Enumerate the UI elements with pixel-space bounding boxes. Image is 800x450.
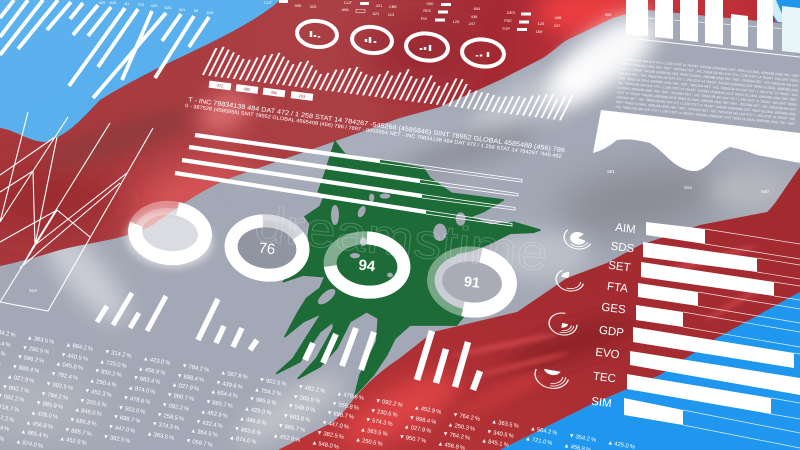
text block top right: SINT 78952 GLOBAL 4585488 (456) 786 / 7897 - 0002564 NET - INC 79834138 484 DAT 472 / 1 258 STAT 14 784267 -545 <box>618 76 798 97</box>
text block top right: GLOBAL 4565408 (456) 786 / 7897 - 0002564 NET - INC 79834138 484 DAT 472 / 1 258 STAT 14 784267 -545 SINT 78952 <box>619 62 799 83</box>
radial icon 2 <box>554 267 586 293</box>
donut 3 <box>327 234 407 296</box>
small top legend table: CUT <box>344 0 353 5</box>
comb chart value tags: 485 <box>243 86 251 92</box>
donut 4: 91 <box>463 274 481 292</box>
chart axis labels top-left: 325 <box>99 0 106 5</box>
category labels: SET <box>608 260 631 274</box>
small top legend table: 421 <box>376 3 383 8</box>
chart axis labels top-left: 625 <box>207 10 214 15</box>
chart axis labels top-left: 81 <box>125 1 130 6</box>
donut 3: 94 <box>358 257 377 275</box>
bar group B <box>198 299 257 350</box>
top right column chart <box>626 0 800 57</box>
category labels: SDS <box>610 241 635 255</box>
radial icon 1 <box>562 225 594 251</box>
small top legend table: CUT <box>264 0 273 5</box>
category labels: SIM <box>590 396 612 410</box>
category labels: GES <box>601 302 626 316</box>
chart axis labels top-left <box>99 0 214 15</box>
flag: top-right blue corner <box>762 0 800 25</box>
category labels: AIM <box>614 222 636 236</box>
category labels: EVO <box>595 347 620 361</box>
small rings row <box>296 19 505 69</box>
text block top right: INC 79834138 484 DAT 472 / 1 258 STAT 14 784267 -545268 (4585846) SINT 78952 GLOBAL 4585488 (456) 786 / 7897 <box>615 105 795 126</box>
chart axis labels top-left: 421 <box>179 7 186 12</box>
text block top right: STAT 14 784267 -545268 (4585846) SINT 78952 GLOBAL 4585488 (456) 786 / 7897 - 0002564 NET - INC 79834138 484 DAT <box>619 67 799 88</box>
area chart top right: 614 <box>684 185 692 190</box>
donut 2: 76 <box>258 240 276 258</box>
small top legend table: 125 <box>538 21 545 26</box>
watermark: dreamstime <box>252 195 551 282</box>
donut 4 <box>432 250 512 314</box>
ring 2 <box>351 25 393 55</box>
flag: lower-right blue <box>500 292 800 450</box>
category labels: GDP <box>598 325 625 340</box>
progress bars <box>175 135 522 226</box>
category labels <box>590 222 636 410</box>
chart: line chart with frame <box>0 112 153 311</box>
small top legend table: 436 <box>555 15 562 20</box>
small top legend table: CBE <box>389 4 397 9</box>
text block top right: 0002564 NET - INC 79834138 484 DAT 472 / 1 258 STAT 14 784267 -545268 (4585846) SINT 78952 GLOBAL 4585488 (456) <box>619 71 798 93</box>
small top legend table: R03 <box>423 8 431 13</box>
radial icon 3 <box>547 311 579 337</box>
chart axis labels top-left: 625 <box>165 5 172 10</box>
area chart top right: 640 <box>761 189 769 194</box>
data grid of percentages: ▲ 384.2 % ▲ 363.5 % ▲ 884.2 % ▼ 314.2 % ▲ 423.0 % ▼ 784.2 % ▲ 587.8 % ▼ 902.5 % ▼ 482.2 % ▲ 478.6 % ▼ 092.2 % ▲ 452.9 % ▼ 764.2 % ▲ 363.5 % ▲ 564.2 % ▼ 354.2 % ▲ 425.0 % <box>0 328 635 450</box>
small top legend table: 125 <box>453 19 460 24</box>
small top legend table: 113 <box>388 12 395 17</box>
small top legend table: 436 <box>471 14 478 19</box>
small top legend table: 521 <box>373 11 380 16</box>
small top legend table: 090 <box>427 1 434 6</box>
comb chart value tags: 456 <box>270 90 278 95</box>
chart: line chart with frame: 614 <box>29 288 37 293</box>
text block top right: INC 79834138 484 DAT 472 / 1 258 STAT 14 784267 -545268 (4585846) SINT 78952 GLOBAL 4585488 (456) 786 / 7897 <box>620 57 800 78</box>
area chart top right: 661 <box>607 169 615 174</box>
chart axis labels top-left: 825 <box>110 0 117 5</box>
chart: comb bar chart <box>203 45 575 120</box>
highlight: fold glare near the top right <box>535 1 670 121</box>
ring 4 <box>461 37 505 69</box>
area chart top right <box>593 110 800 194</box>
ring 1 <box>296 19 338 49</box>
flag: lower red band <box>278 167 800 450</box>
flag: upper red band <box>0 0 782 266</box>
small top legend table: 247 <box>554 23 561 28</box>
comb chart value tags: 472 <box>216 83 224 88</box>
icon: green cedar tree <box>277 142 540 395</box>
text block top right: SINT 78952 GLOBAL 4585488 (456) 786 / 7897 - 0002564 NET - INC 79834138 484 DAT 472 / 1 258 STAT 14 784267 -545 <box>616 100 795 121</box>
comb chart value tags <box>209 81 313 101</box>
category labels: TEC <box>592 371 617 385</box>
small top legend table: 247 <box>469 21 476 26</box>
chart axis labels top-left: 724 <box>138 2 145 7</box>
small top legend table: FIX <box>421 16 427 21</box>
bar group D <box>417 331 480 390</box>
chart axis labels top-left: 443 <box>151 3 158 8</box>
small top legend table: 300 <box>605 12 612 17</box>
bar group A <box>97 293 166 331</box>
small top legend table: 654 <box>474 6 481 11</box>
small top legend table: 325 <box>310 4 317 9</box>
text block top right <box>615 57 800 126</box>
category labels: FTA <box>606 281 629 295</box>
radial icon 4 <box>533 359 571 391</box>
donut 2 <box>228 217 306 279</box>
small top legend table: 095 <box>295 3 302 8</box>
small top legend table: A56 <box>341 7 349 12</box>
small top legend table: 169 <box>536 29 543 34</box>
small top legend table: FSE <box>504 18 512 23</box>
ticker text lines: 0 - 387526 (4585956) SNIT 78952 GLOBAL 4565408 (456) 786 / 7897 - 0002564 NET - INC 79834138 484 DAT 472 / 1 258 STAT 14 784267 -545 492 <box>185 103 562 160</box>
chart: long slanted bars top-left <box>0 0 209 98</box>
text block top right: GLOBAL 4565408 (456) 786 / 7897 - 0002564 NET - INC 79834138 484 DAT 472 / 1 258 STAT 14 784267 -545 SINT 78952 <box>617 86 797 107</box>
comb chart value tags: 263 <box>298 93 306 99</box>
text block top right: STAT 14 784267 -545268 (4585846) SINT 78952 GLOBAL 4585488 (456) 786 / 7897 - 0002564 NET - INC 79834138 484 DAT <box>617 90 796 112</box>
ring 3 <box>405 31 449 63</box>
ticker text lines: T - INC 79834138 484 DAT 472 / 1 258 STAT 14 784267 -545268 (4585846) SINT 78952 GLOBAL 4585488 (456) 786 <box>188 97 566 154</box>
small top legend table <box>264 0 612 34</box>
right bar chart <box>624 222 800 448</box>
donut 1 <box>123 204 216 272</box>
chart axis labels top-left: 68 <box>194 8 199 13</box>
small top legend table: TOP <box>502 26 510 31</box>
bar group C <box>305 328 374 370</box>
text block top right: INC 79834138 484 DAT 472 / 1 258 STAT 14 784267 -545268 (4585846) SINT 78952 GLOBAL 4585488 (456) 786 / 7897 <box>618 81 797 102</box>
small top legend table: DES <box>507 10 515 15</box>
text block top right: 0002564 NET - INC 79834138 484 DAT 472 / 1 258 STAT 14 784267 -545268 (4585846) SINT 78952 GLOBAL 4585488 (456) <box>616 95 796 116</box>
